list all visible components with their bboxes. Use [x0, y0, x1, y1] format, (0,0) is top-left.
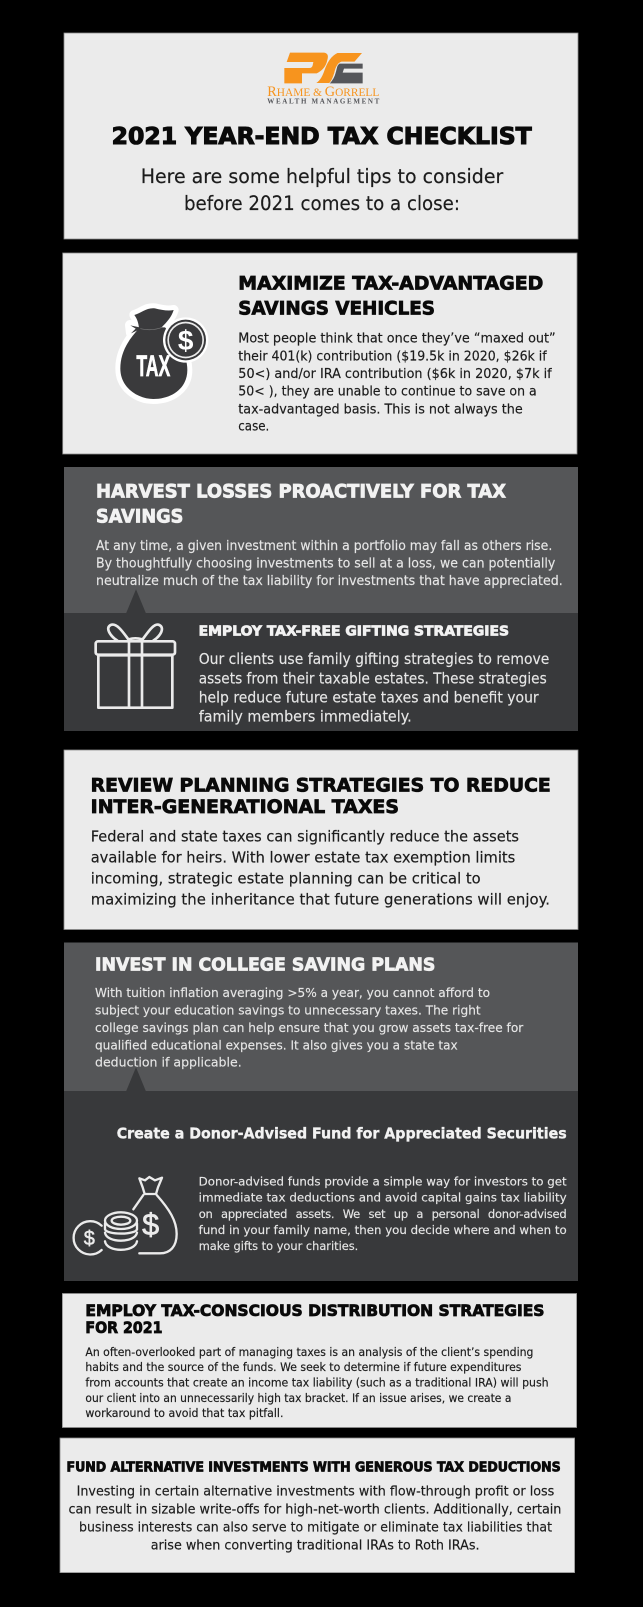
body text: Most people think that once they’ve “maxed out”: [238, 332, 556, 347]
panel: distribution strategies: [62, 1294, 577, 1428]
body text: college: deduction if applicable.: [95, 1056, 242, 1071]
body text: college: qualified educational expenses. It also gives you a state tax: [95, 1038, 458, 1053]
body text: college: With tuition inflation averaging >5% a year, you cannot afford to: [95, 986, 490, 1001]
panel: maximize tax-advantaged savings: [63, 253, 577, 454]
heading: [238, 273, 543, 319]
logo: Rhame & Gorrell Wealth Management: RHAME & GORRELL: [267, 84, 379, 100]
body text: harvest losses: At any time, a given investment within a portfolio may fall as others rise.: [96, 539, 552, 554]
panel: college savings and donor-advised fund: [64, 942, 578, 1281]
body text: gifting: Our clients use family gifting strategies to remove: [199, 651, 549, 668]
connector arrow: [126, 1067, 146, 1092]
body text: 50<) and/or IRA contribution ($6k in 2020, $7k if: [238, 367, 552, 382]
icon: money bag and coins: $: [84, 1228, 95, 1250]
intro text: [141, 165, 504, 215]
icon: tax money bag: $: [178, 325, 194, 356]
body text: gifting: help reduce future estate taxes and benefit your: [199, 689, 540, 706]
heading: donor-advised fund: Create a Donor-Advised Fund for Appreciated Securities: [117, 1124, 567, 1142]
body text: donor-advised fund: on appreciated assets. We set up a personal donor-advised: [199, 1207, 567, 1221]
heading: gifting: EMPLOY TAX-FREE GIFTING STRATEGIES: [199, 623, 509, 639]
intro text: Here are some helpful tips to consider: [141, 165, 504, 188]
body text: [91, 828, 550, 909]
body text: An often-overlooked part of managing taxes is an analysis of the client’s spending: [85, 1345, 533, 1359]
body text: incoming, strategic estate planning can be critical to: [91, 870, 481, 888]
panel: header: [64, 33, 578, 239]
title: 2021 YEAR-END TAX CHECKLIST: [112, 122, 532, 150]
icon: money bag and coins: [74, 1177, 177, 1254]
body text: [85, 1345, 549, 1420]
body text: Federal and state taxes can significantly reduce the assets: [91, 828, 519, 846]
body text: gifting: assets from their taxable estates. These strategies: [199, 670, 547, 687]
body text: maximizing the inheritance that future generations will enjoy.: [91, 891, 550, 909]
body text: donor-advised fund: [199, 1175, 567, 1253]
heading: SAVINGS VEHICLES: [238, 298, 435, 319]
logo: Rhame & Gorrell Wealth Management: [267, 53, 380, 105]
body text: harvest losses: neutralize much of the tax liability for investments that have appreciated.: [96, 574, 563, 589]
body text: arise when converting traditional IRAs to Roth IRAs.: [151, 1538, 480, 1553]
heading: FOR 2021: [85, 1318, 162, 1337]
body text: donor-advised fund: fund in your family name, then you decide where and when to: [199, 1223, 567, 1237]
body text: can result in sizable write-offs for high-net-worth clients. Additionally, certain: [68, 1502, 561, 1518]
body text: harvest losses: By thoughtfully choosing investments to sell at a loss, we can potentially: [96, 557, 556, 572]
body text: habits and the source of the funds. We seek to determine if future expenditures: [85, 1360, 522, 1374]
heading: MAXIMIZE TAX-ADVANTAGED: [238, 273, 543, 294]
heading: harvest losses: HARVEST LOSSES PROACTIVELY FOR TAX: [96, 481, 506, 502]
panel: inter-generational taxes: [64, 750, 578, 930]
heading: FUND ALTERNATIVE INVESTMENTS WITH GENEROUS TAX DEDUCTIONS: [66, 1461, 561, 1476]
body text: donor-advised fund: immediate tax deductions and avoid capital gains tax liability: [199, 1191, 567, 1205]
body text: gifting: family members immediately.: [199, 709, 412, 726]
heading: harvest losses: SAVINGS: [96, 506, 183, 527]
body text: harvest losses: [96, 539, 563, 589]
heading: [85, 1301, 545, 1337]
body text: college: [95, 986, 524, 1071]
icon: money bag and coins: $: [142, 1208, 159, 1242]
body text: their 401(k) contribution ($19.5k in 2020, $26k if: [238, 349, 547, 364]
icon: gift box: [96, 625, 175, 708]
body text: from accounts that create an income tax liability (such as a traditional IRA) will push: [85, 1375, 549, 1389]
heading: [91, 776, 551, 818]
heading: INTER-GENERATIONAL TAXES: [91, 797, 399, 818]
body text: available for heirs. With lower estate tax exemption limits: [91, 849, 515, 867]
body text: college: subject your education savings to unnecessary taxes. The right: [95, 1003, 481, 1018]
connector arrow: [126, 589, 146, 614]
body text: gifting: [199, 651, 549, 726]
intro text: before 2021 comes to a close:: [184, 192, 460, 215]
heading: harvest losses: [96, 481, 506, 527]
body text: business interests can also serve to mitigate or eliminate tax liabilities that: [79, 1520, 552, 1535]
panel: harvest losses and gifting: [64, 467, 578, 731]
heading: EMPLOY TAX-CONSCIOUS DISTRIBUTION STRATEGIES: [85, 1301, 545, 1320]
body text: workaround to avoid that tax pitfall.: [85, 1406, 284, 1420]
body text: case.: [238, 420, 269, 435]
body text: Investing in certain alternative investments with flow-through profit or loss: [77, 1485, 554, 1500]
panel: alternative investments: [60, 1438, 575, 1573]
icon: tax money bag: TAX: [136, 350, 171, 383]
body text: our client into an unnecessarily high tax bracket. If an issue arises, we create a: [85, 1391, 511, 1405]
heading: REVIEW PLANNING STRATEGIES TO REDUCE: [91, 776, 551, 797]
body text: college: college savings plan can help ensure that you grow assets tax-free for: [95, 1021, 524, 1036]
body text: donor-advised fund: Donor-advised funds provide a simple way for investors to get: [199, 1175, 567, 1189]
heading: college: INVEST IN COLLEGE SAVING PLANS: [95, 954, 435, 975]
body text: donor-advised fund: make gifts to your charities.: [199, 1239, 358, 1253]
body text: 50< ), they are unable to continue to save on a: [238, 385, 537, 400]
body text: [68, 1485, 561, 1553]
logo: Rhame & Gorrell Wealth Management: WEALTH MANAGEMENT: [267, 97, 380, 105]
body text: [238, 332, 556, 435]
icon: tax money bag: [120, 308, 208, 399]
body text: tax-advantaged basis. This is not always the: [238, 402, 523, 417]
